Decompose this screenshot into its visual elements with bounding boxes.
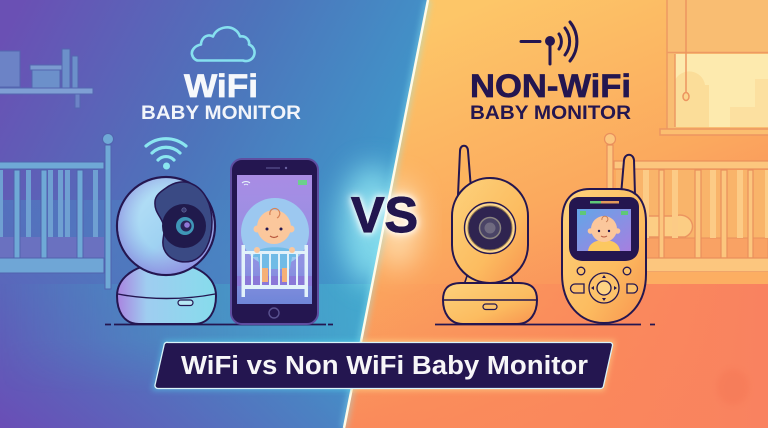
- WiFi camera: [117, 177, 216, 324]
- smartphone: [231, 159, 318, 324]
- banner title: WiFi vs Non WiFi Baby Monitor: [181, 352, 588, 380]
- background: non-WiFi side: [340, 0, 768, 428]
- heading: NON-WiFi: NON-WiFi: [470, 68, 631, 104]
- icon: wifi signal above camera: [146, 139, 186, 170]
- background: crib on the WiFi side: [0, 134, 114, 289]
- controls: [570, 267, 638, 303]
- camera base: [443, 283, 537, 324]
- crib in phone: [242, 245, 308, 297]
- handheld parent unit: [562, 155, 646, 323]
- handheld antenna: [621, 155, 635, 195]
- heading: WiFi: [141, 68, 301, 124]
- camera antenna: [458, 146, 471, 195]
- background: window with blind on the non-WiFi side: [660, 0, 768, 135]
- lens: [464, 202, 516, 254]
- background: crib on the non-WiFi side: [604, 134, 768, 284]
- heading: WiFi: WiFi: [184, 68, 258, 104]
- ground line left: [105, 324, 333, 326]
- camera head: [117, 177, 215, 275]
- VS label: VS: [351, 187, 418, 243]
- ground line right: [435, 324, 655, 326]
- glowing diagonal divider: [344, 0, 428, 428]
- icon: cloud: [192, 27, 255, 61]
- background: shelf with frame and books: [0, 49, 93, 108]
- sub-heading: baby monitor right: BABY MONITOR: [470, 102, 631, 124]
- title banner: [155, 342, 613, 389]
- status icons: [242, 181, 250, 185]
- non-WiFi camera: [443, 146, 537, 324]
- screen: [569, 197, 639, 261]
- baby: [252, 247, 298, 269]
- baby picture: [237, 198, 312, 297]
- background: WiFi side: [0, 0, 430, 428]
- heading: NON-WiFi: [470, 68, 631, 124]
- icon: radio signal: [521, 22, 577, 64]
- camera body: [452, 178, 528, 283]
- sub-heading: baby monitor left: BABY MONITOR: [141, 102, 301, 124]
- camera base: [117, 263, 216, 324]
